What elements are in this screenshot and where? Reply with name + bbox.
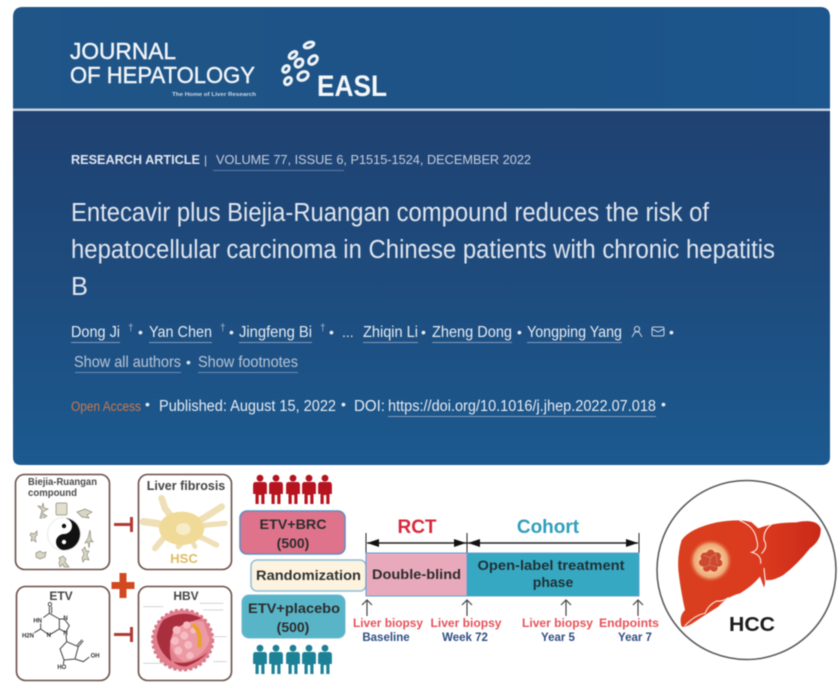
- article title: [71, 199, 775, 301]
- authors: †: [128, 323, 134, 334]
- authors: Dong Ji: [71, 324, 120, 341]
- icon: entecavir structure: N: [63, 631, 68, 637]
- timepoint labels: [353, 616, 659, 644]
- publication line: •: [341, 396, 346, 412]
- authors: Yongping Yang: [527, 324, 622, 341]
- authors: Zheng Dong: [432, 324, 512, 341]
- ETV+placebo arm: ETV+placebo: [248, 600, 340, 616]
- ETV+placebo arm: [242, 595, 345, 638]
- panel: journal article header: [13, 7, 830, 465]
- open-label phase: Open-label treatment: [478, 557, 625, 573]
- publication line: https://doi.org/10.1016/j.jhep.2022.07.018: [388, 398, 656, 415]
- icon: plus: [112, 573, 134, 598]
- publication line: •: [661, 396, 666, 412]
- HSC label: HSC: [170, 551, 198, 566]
- double-blind phase: [366, 553, 467, 596]
- timepoint labels: Baseline: [362, 632, 410, 644]
- authors: ...: [342, 324, 354, 340]
- heading: Cohort: Cohort: [517, 517, 580, 538]
- ETV+placebo arm: (500): [277, 619, 309, 635]
- ETV+BRC arm: (500): [277, 535, 309, 551]
- journal name: The Home of Liver Research: [172, 92, 257, 98]
- icon: hepatitis B virus: [143, 603, 227, 670]
- authors: [71, 323, 674, 343]
- randomization box: [251, 560, 366, 591]
- timepoint labels: Liver biopsy: [353, 616, 423, 630]
- icon: red patient group: [253, 475, 332, 504]
- publication line: [71, 396, 666, 417]
- panel: HBV: [138, 586, 232, 680]
- compound title: Biejia-Ruangan: [28, 477, 97, 488]
- timepoint labels: Liver biopsy: [522, 616, 593, 630]
- timepoint labels: Year 7: [618, 632, 652, 644]
- compound title: [28, 477, 97, 499]
- publication line: DOI:: [354, 398, 385, 415]
- authors: •: [669, 324, 674, 340]
- publication line: Open Access: [71, 399, 141, 414]
- article title: Entecavir plus Biejia-Ruangan compound reduces the risk of: [71, 199, 710, 227]
- panel: Biejia-Ruangan compound: [16, 474, 110, 570]
- article body background: [13, 111, 830, 465]
- timeline span arrows: [366, 533, 639, 553]
- open-label phase: [467, 553, 639, 596]
- show authors links: Show all authors: [74, 354, 181, 371]
- authors: •: [517, 324, 522, 340]
- icon: entecavir structure: N: [47, 633, 51, 639]
- article metadata: |: [204, 153, 207, 167]
- publication line: Published: August 15, 2022: [159, 398, 336, 415]
- authors: Yan Chen: [149, 324, 212, 341]
- show authors links: Show footnotes: [198, 354, 298, 371]
- randomization box: Randomization: [256, 567, 361, 583]
- authors: •: [329, 324, 334, 340]
- double-blind phase: Double-blind: [372, 566, 461, 582]
- authors: •: [138, 324, 143, 340]
- article metadata: RESEARCH ARTICLE: [71, 152, 200, 167]
- icon: mail: [652, 327, 664, 336]
- journal name: OF HEPATOLOGY: [70, 62, 255, 88]
- timepoint labels: Liver biopsy: [430, 616, 502, 630]
- heading: RCT: RCT: [397, 517, 437, 538]
- article metadata: [71, 152, 531, 171]
- icon: entecavir structure: OH: [91, 654, 100, 660]
- inhibit arrow: compound to fibrosis: [114, 517, 133, 532]
- header band: [13, 7, 830, 109]
- show authors links: •: [186, 354, 191, 370]
- journal name: JOURNAL: [70, 38, 176, 64]
- article metadata: VOLUME 77, ISSUE 6, P1515-1524, DECEMBER 2022: [216, 152, 531, 167]
- open-label phase: phase: [533, 574, 573, 590]
- authors: †: [220, 323, 226, 334]
- timepoint arrows: [362, 600, 643, 616]
- icon: EASL logo: [281, 41, 319, 86]
- icon: hepatic stellate cell: [143, 498, 225, 548]
- divider line: [13, 108, 830, 111]
- timepoint labels: Week 72: [442, 632, 488, 644]
- icon: yin yang: [48, 518, 80, 550]
- journal name: [70, 38, 257, 98]
- icon: teal patient group: [253, 645, 332, 674]
- publication line: •: [145, 396, 150, 412]
- ETV title: ETV: [49, 589, 73, 603]
- timepoint labels: Year 5: [541, 632, 576, 644]
- article title: B: [71, 273, 88, 301]
- show authors links: [74, 354, 298, 373]
- authors: Zhiqin Li: [363, 324, 418, 341]
- icon: entecavir structure: HN: [33, 618, 42, 624]
- icon: liver with tumour: [678, 520, 821, 627]
- ETV+BRC arm: [240, 511, 345, 554]
- icon: entecavir structure: HO: [57, 665, 67, 671]
- HBV title: HBV: [173, 589, 199, 603]
- ETV+BRC arm: ETV+BRC: [260, 516, 326, 532]
- panel: HCC outcome: [657, 480, 836, 660]
- icon: entecavir structure: N: [63, 616, 68, 622]
- EASL wordmark: EASL: [317, 70, 387, 103]
- authors: Jingfeng Bi: [239, 324, 312, 341]
- liver fibrosis title: Liver fibrosis: [147, 479, 225, 493]
- compound title: compound: [28, 488, 77, 499]
- article title: hepatocellular carcinoma in Chinese patients with chronic hepatitis: [71, 236, 775, 264]
- authors: †: [320, 323, 326, 334]
- icon: entecavir structure: H2N: [22, 633, 34, 639]
- icon: person: [632, 326, 642, 337]
- HCC label: HCC: [729, 613, 775, 636]
- authors: •: [421, 324, 426, 340]
- icon: herbs: [30, 503, 93, 567]
- authors: •: [229, 324, 234, 340]
- icon: entecavir structure: [22, 602, 100, 671]
- icon: entecavir structure: O: [48, 602, 53, 608]
- panel: liver fibrosis: [138, 474, 232, 570]
- inhibit arrow: ETV to HBV: [114, 627, 133, 642]
- panel: ETV: [16, 586, 110, 680]
- timepoint labels: Endpoints: [599, 616, 659, 630]
